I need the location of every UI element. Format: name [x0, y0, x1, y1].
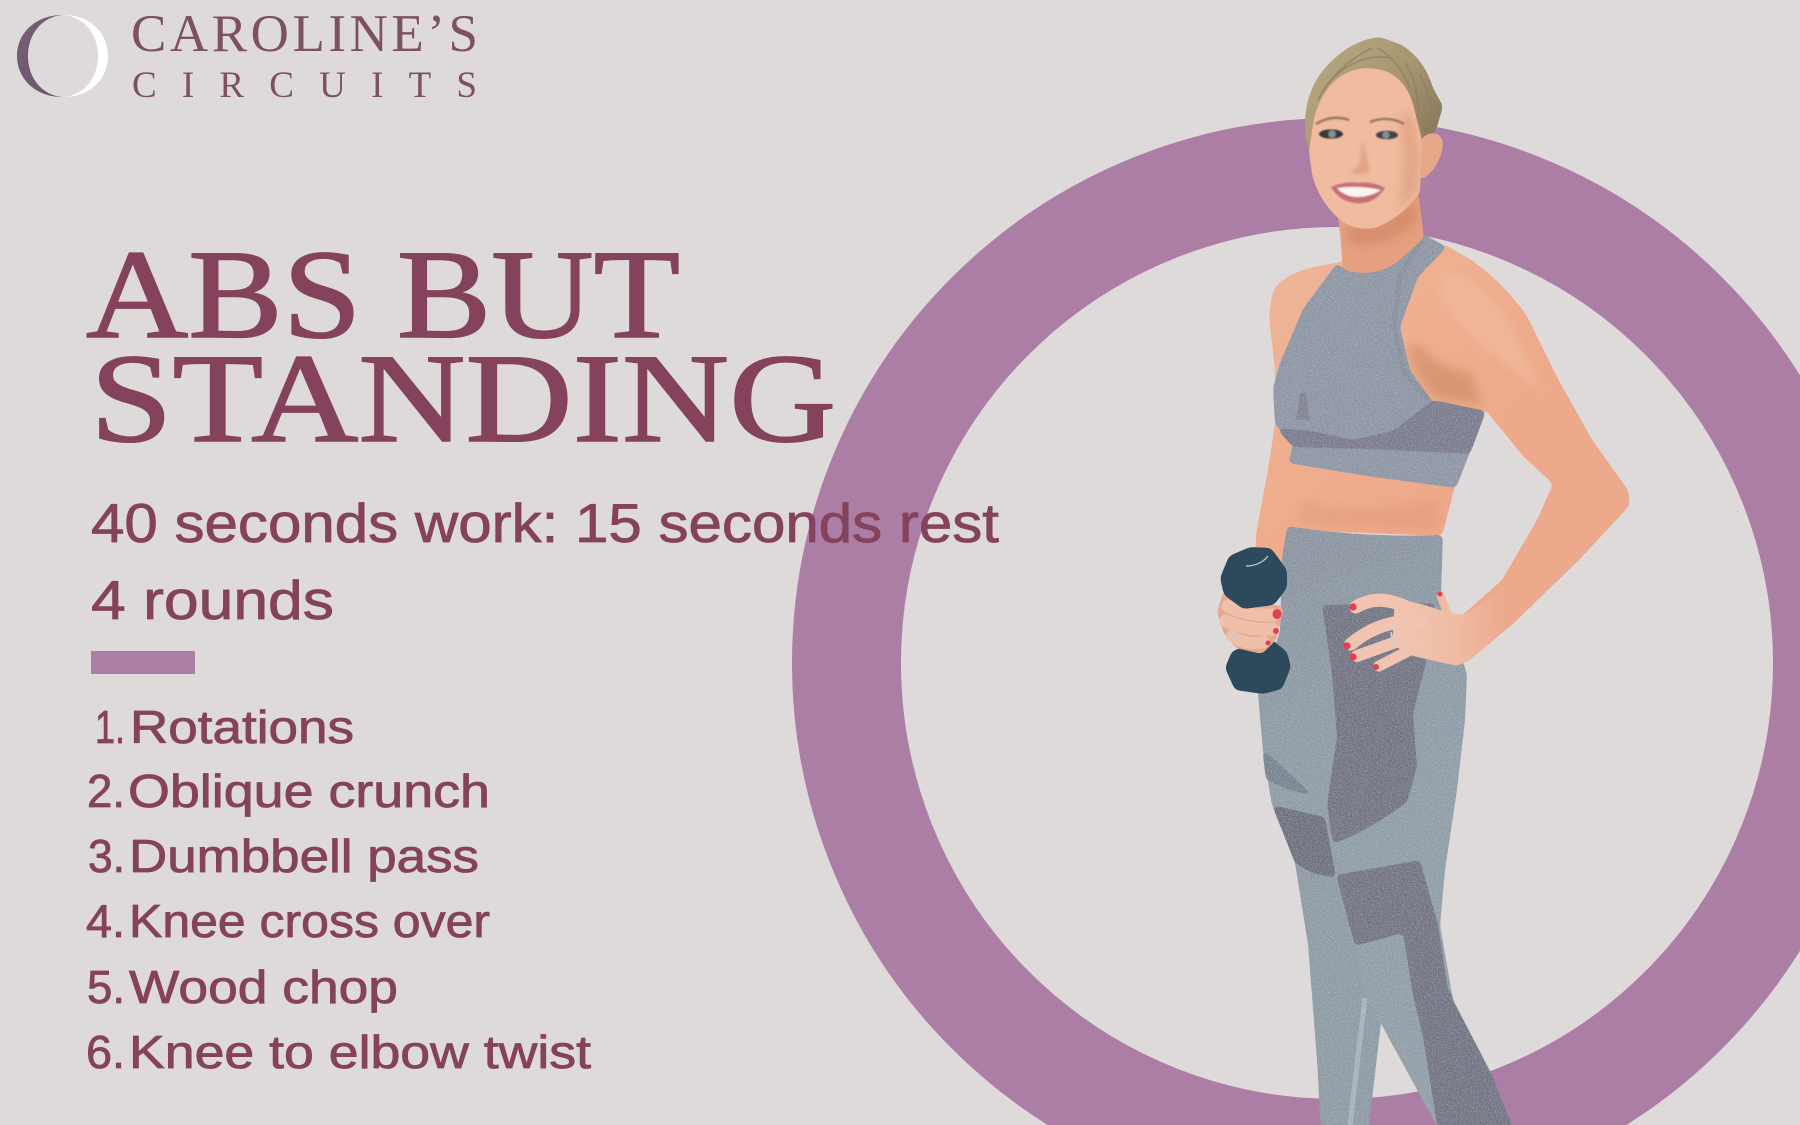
eyes: [1319, 129, 1398, 139]
palm and wrist: [1392, 590, 1515, 666]
subheading: rounds: 4 rounds: [91, 569, 334, 631]
gripping fingers: [1226, 606, 1274, 643]
accent bar: [91, 651, 195, 674]
dumbbell marking: [1246, 556, 1268, 566]
face: [1309, 68, 1422, 229]
title: STANDING: [90, 328, 836, 469]
fingers: [1351, 600, 1420, 666]
woman in grey activewear holding a dumbbell: [1217, 37, 1630, 1125]
item 4: 4.: [86, 895, 125, 947]
nose: [1350, 140, 1370, 175]
title: [86, 225, 836, 469]
item 6: Knee to elbow twist: [129, 1026, 591, 1078]
logo wordmark line 2: CIRCUITS: [132, 65, 477, 106]
crop top darker panel: [1276, 400, 1486, 454]
side hip panel: [1262, 748, 1315, 797]
lower thigh panel: [1337, 861, 1512, 1125]
exercise list: [86, 701, 591, 1078]
head: [1305, 37, 1443, 273]
crop top: [1273, 234, 1486, 488]
logo wordmark line 1: CAROLINE’S: [131, 5, 478, 63]
front leg and hips: [1258, 526, 1522, 1125]
purple ring: [846, 172, 1800, 1125]
neck: [1336, 190, 1424, 273]
item 1: Rotations: [130, 701, 354, 753]
chin shadow: [1345, 196, 1418, 245]
dumbbell and gripping hand: [1217, 547, 1291, 694]
hip panel: [1322, 603, 1435, 844]
item 6: 6.: [86, 1026, 125, 1078]
item 4: Knee cross over: [129, 895, 490, 947]
item 3: 3.: [88, 830, 125, 882]
subheading: timing: 40 seconds work: 15 seconds rest: [91, 492, 999, 554]
smile: [1331, 182, 1385, 203]
nails and ring: [1231, 609, 1282, 646]
hair: [1305, 37, 1443, 160]
crop top racerback trim: [1343, 238, 1428, 400]
dumbbell top head: [1220, 547, 1287, 609]
item 1: 1.: [95, 701, 125, 753]
palm: [1217, 590, 1284, 654]
crop top chest pattern: [1296, 393, 1310, 420]
ear: [1412, 133, 1443, 181]
shoulder highlight: [1440, 270, 1545, 395]
icon: crescent circle: [17, 15, 108, 97]
back thigh panel: [1272, 805, 1336, 878]
item 5: 5.: [87, 961, 125, 1013]
thumb: [1441, 596, 1448, 614]
item 2: Oblique crunch: [128, 765, 490, 817]
abdominal shading: [1300, 500, 1440, 530]
hand on hip: [1343, 590, 1515, 670]
item 5: Wood chop: [129, 961, 398, 1013]
leggings: [1258, 526, 1512, 1125]
body skin: shoulders, arms, torso: [1255, 240, 1630, 666]
item 3: Dumbbell pass: [129, 830, 479, 882]
wedding ring: [1391, 632, 1393, 645]
eyebrows: [1316, 118, 1404, 124]
underarm shadow: [1408, 345, 1482, 405]
title: ABS BUT: [86, 225, 680, 365]
logo: Caroline's Circuits: [17, 5, 478, 106]
dumbbell bottom head: [1225, 638, 1291, 694]
hair strands: [1318, 48, 1432, 130]
face shading: [1398, 110, 1420, 210]
back leg: [1263, 751, 1381, 1125]
nails: [1343, 592, 1442, 670]
item 2: 2.: [87, 765, 125, 817]
back-leg light seam: [1350, 998, 1365, 1125]
